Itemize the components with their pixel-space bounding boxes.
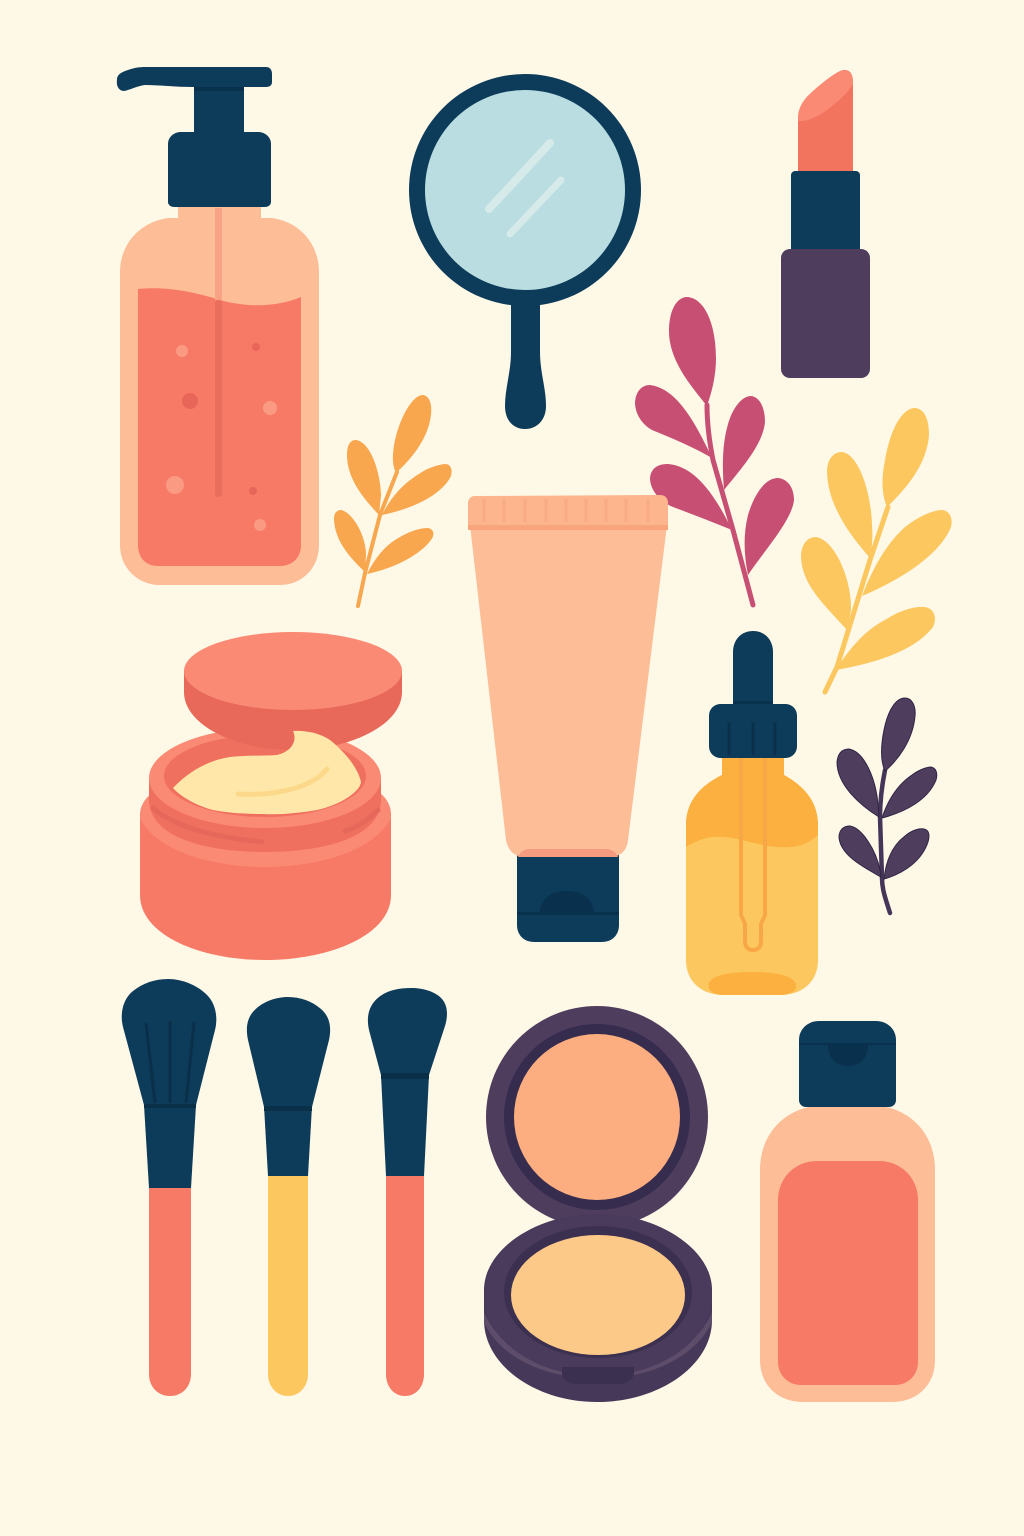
icon: brush two [247, 997, 330, 1396]
icon: magenta leaf sprig [635, 297, 794, 605]
icon: squeeze tube [468, 495, 668, 942]
icon: orange leaf sprig [334, 395, 452, 606]
icon: hand mirror [409, 74, 641, 429]
icon: purple leaf sprig [837, 698, 937, 913]
icon: pump bottle [117, 67, 319, 585]
icon: yellow leaf sprig [801, 408, 952, 692]
icon: brush one [122, 979, 216, 1396]
icon: dropper bottle [686, 631, 818, 995]
icon: lipstick [781, 70, 870, 378]
icon: small bottle [760, 1021, 935, 1402]
icon: brush three [368, 988, 447, 1396]
icon: cream jar [140, 632, 402, 960]
icon: compact [484, 1006, 712, 1402]
